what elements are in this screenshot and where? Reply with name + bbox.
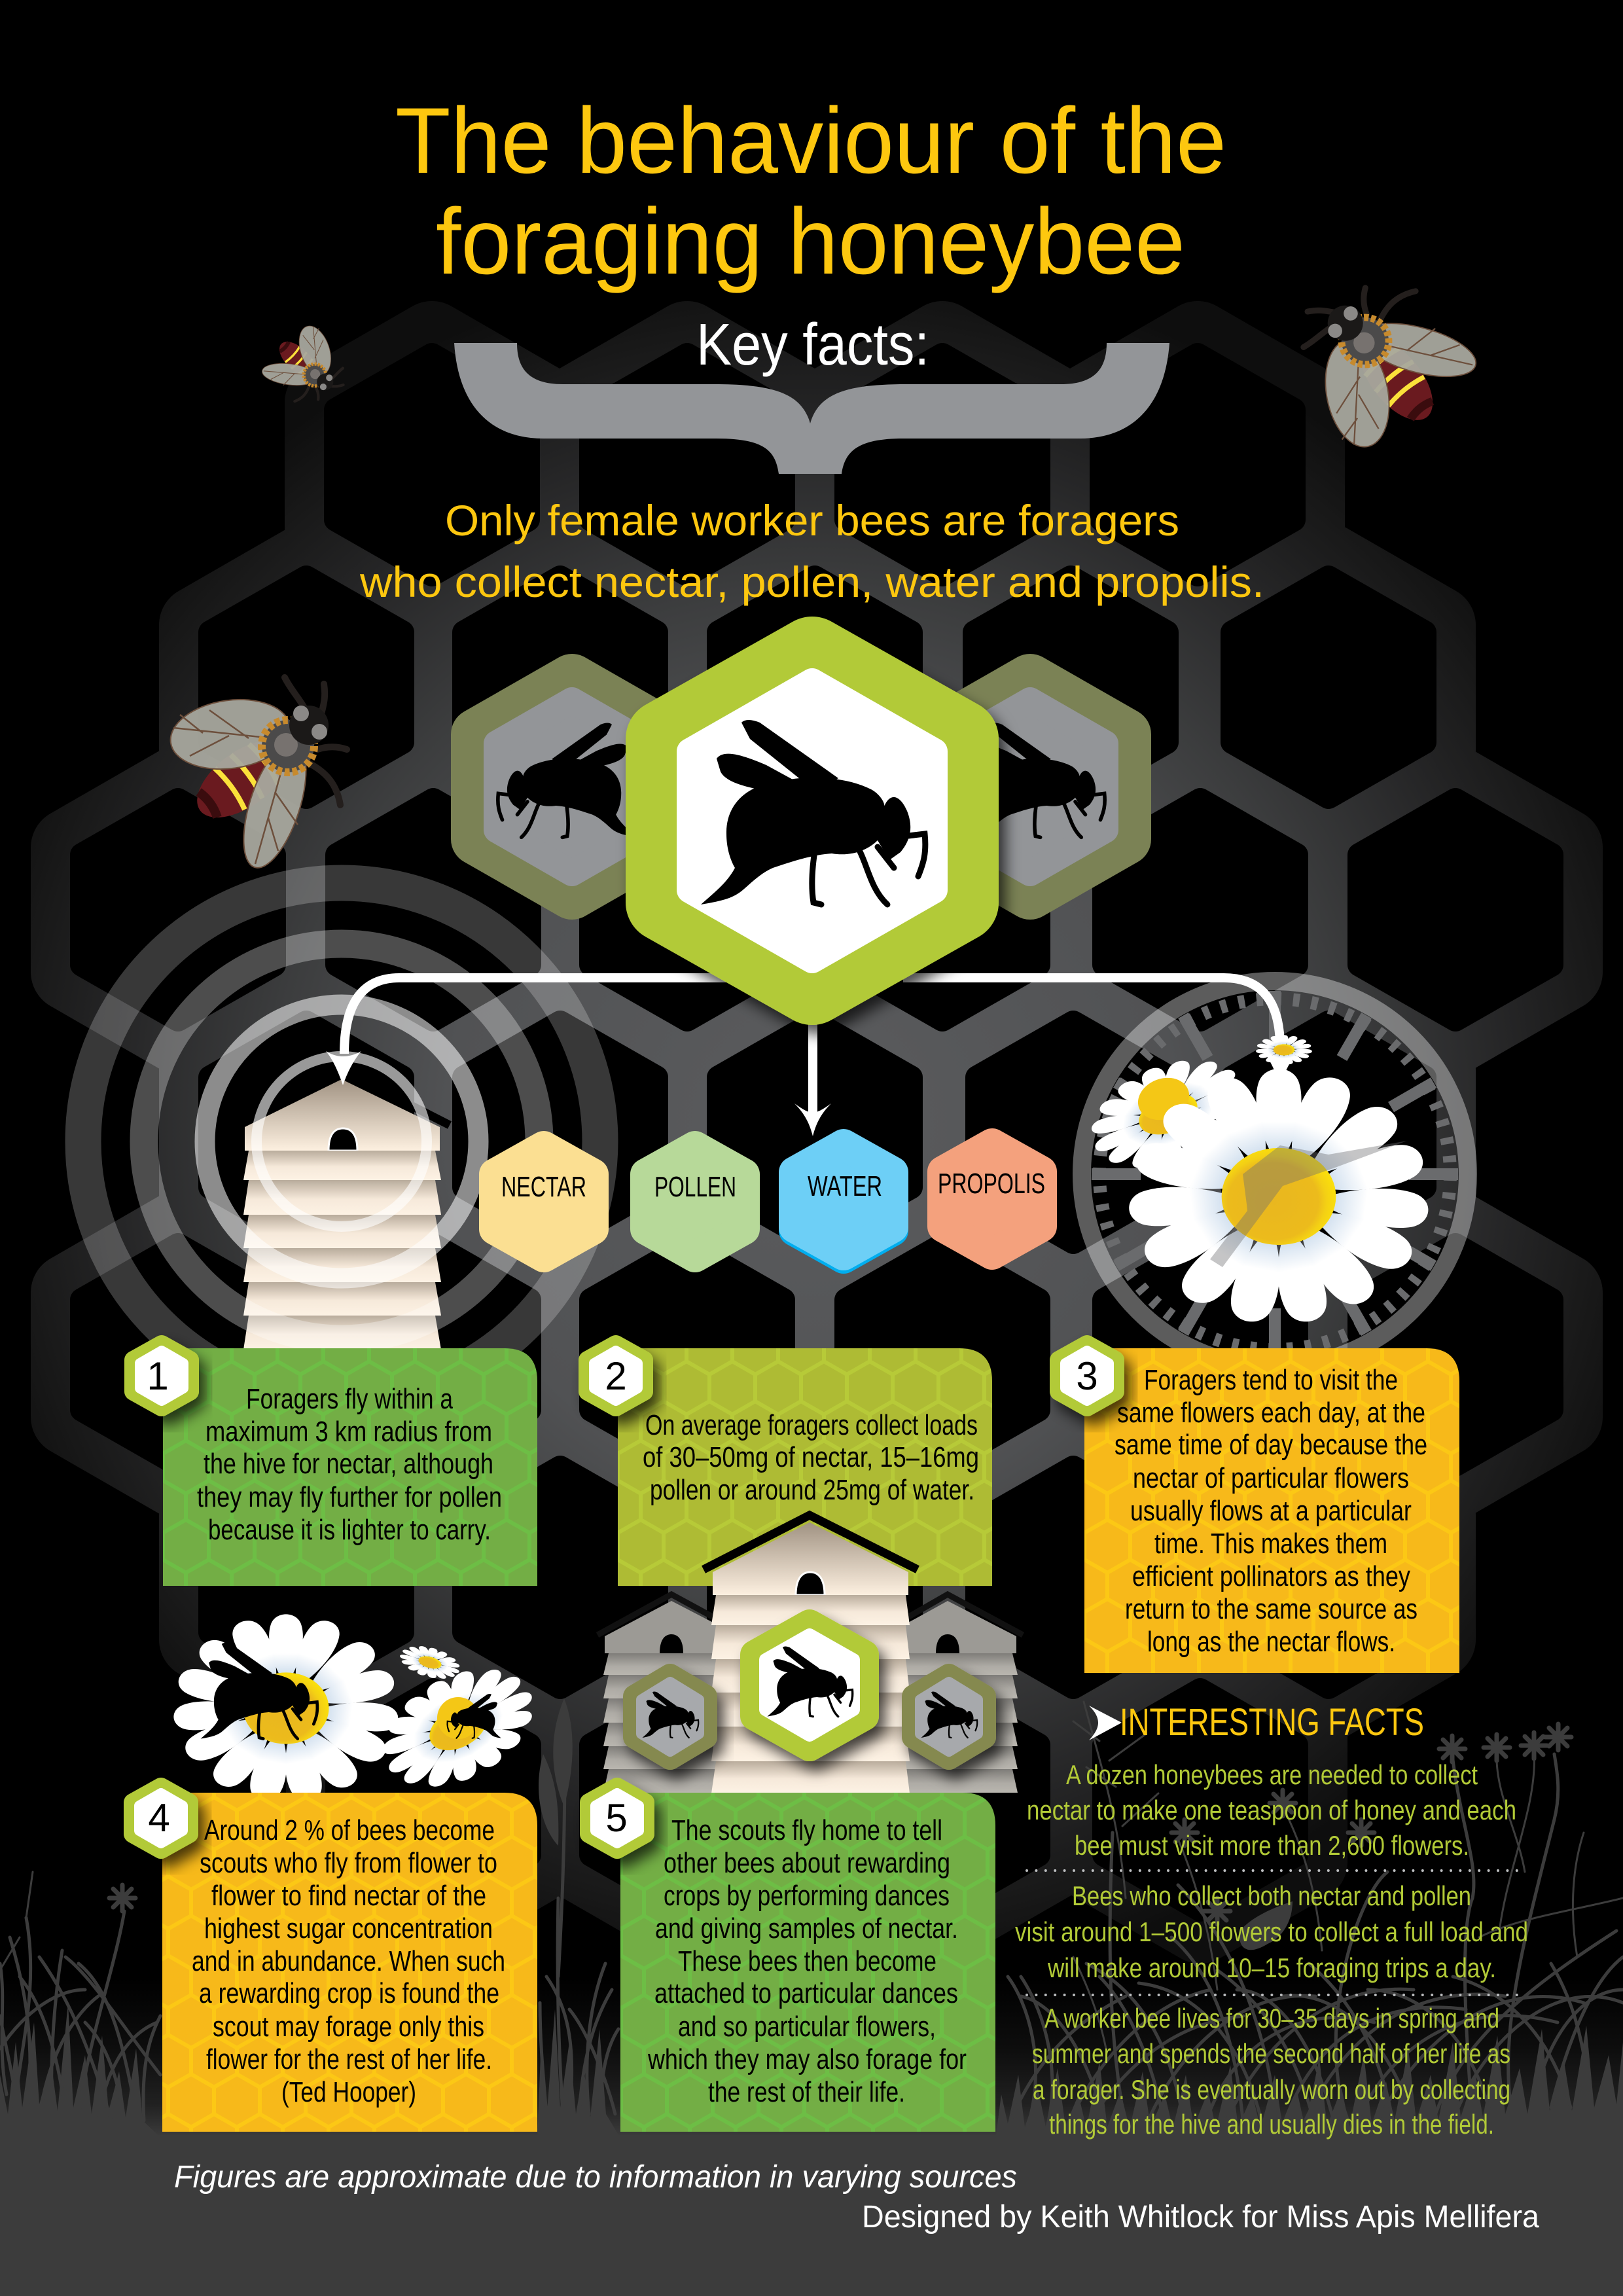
clock hands xyxy=(1210,1141,1407,1267)
interesting fact 1: A dozen honeybees are needed to collect xyxy=(1066,1759,1478,1790)
panel 1 text: the hive for nectar, although xyxy=(204,1448,493,1480)
clock xyxy=(1082,981,1468,1367)
panel 4 text: scout may forage only this xyxy=(213,2011,484,2043)
dotted divider xyxy=(1027,1994,1521,1996)
panel 5 text: which they may also forage for xyxy=(647,2043,967,2075)
panel 4 text: (Ted Hooper) xyxy=(281,2076,416,2108)
panel 3 text: return to the same source as xyxy=(1125,1593,1418,1625)
panel 5 text: and so particular flowers, xyxy=(678,2011,936,2043)
panel 5 text: These bees then become xyxy=(678,1945,936,1977)
daisy with bee: large xyxy=(172,1614,400,1803)
badge 2: 2 xyxy=(605,1354,627,1398)
panel 2 text: On average foragers collect loads xyxy=(645,1409,978,1441)
daisy with bee: small xyxy=(363,1645,554,1812)
panel 5 text xyxy=(647,1814,967,2108)
intro statement: Only female worker bees are foragers xyxy=(445,496,1179,545)
panel 3 text: long as the nectar flows. xyxy=(1147,1626,1395,1658)
badge 1: 1 xyxy=(147,1354,169,1398)
badge 3: 3 xyxy=(1076,1354,1098,1398)
hive badge: right bee xyxy=(914,1676,984,1758)
tag: water: WATER xyxy=(808,1170,882,1202)
side hives xyxy=(597,1594,1023,1793)
panel 2 text xyxy=(643,1409,979,1506)
interesting fact 2 xyxy=(1015,1880,1528,1983)
panel 4 text: a rewarding crop is found the xyxy=(199,1977,499,2009)
tag: propolis: PROPOLIS xyxy=(938,1168,1045,1200)
arrow: to hive xyxy=(326,978,726,1085)
credit: Designed by Keith Whitlock for Miss Apis Mellifera xyxy=(862,2200,1539,2234)
curly brace xyxy=(454,343,1169,474)
title: foraging honeybee xyxy=(436,190,1185,294)
interesting facts heading: INTERESTING FACTS xyxy=(1120,1701,1424,1744)
bee: left large xyxy=(166,677,347,875)
bee: top left small xyxy=(252,319,348,410)
hive top box xyxy=(245,1079,440,1151)
title xyxy=(395,89,1226,294)
left side hive xyxy=(597,1594,746,1793)
daisy on clock: second flower xyxy=(1075,1039,1262,1190)
interesting fact 2: will make around 10–15 foraging trips a day. xyxy=(1047,1952,1496,1983)
daisy on clock: main flower xyxy=(1127,1069,1431,1325)
panel 4 text: and in abundance. When such xyxy=(192,1945,505,1977)
panel 4 xyxy=(162,1793,537,2132)
panel 5 text: The scouts fly home to tell xyxy=(671,1814,942,1846)
side hexagon: right bee xyxy=(935,680,1125,893)
panel 3 text: usually flows at a particular xyxy=(1130,1495,1412,1527)
badge 4 xyxy=(133,1787,189,1850)
hive 1 xyxy=(236,1070,450,1350)
panel 4 text: highest sugar concentration xyxy=(204,1912,493,1945)
interesting fact 3: A worker bee lives for 30–35 days in spring and xyxy=(1044,2003,1499,2034)
honeycomb background grid xyxy=(31,301,1603,1964)
panel 5 xyxy=(620,1793,995,2132)
badge 5 xyxy=(589,1787,645,1850)
centre hive xyxy=(704,1515,918,1793)
interesting fact 3 xyxy=(1032,2003,1510,2140)
central bee hexagon xyxy=(665,656,959,986)
interesting fact 2: Bees who collect both nectar and pollen xyxy=(1072,1880,1471,1911)
radius rings around hive xyxy=(83,883,600,1400)
badge 3 xyxy=(1059,1344,1115,1407)
panel 5 text: the rest of their life. xyxy=(708,2076,905,2108)
panel 4 text: scouts who fly from flower to xyxy=(200,1847,497,1879)
interesting fact 2: visit around 1–500 flowers to collect a full load and xyxy=(1015,1916,1528,1947)
meadow grass silhouette and ground band xyxy=(0,1698,1623,2296)
tiny daisy on arrow xyxy=(1255,1035,1313,1065)
bee: top right xyxy=(1300,282,1487,454)
heading: key facts: Key facts: xyxy=(696,312,929,378)
panel 3 text xyxy=(1115,1364,1427,1658)
panel 4 text xyxy=(192,1814,505,2108)
arrow: to resources xyxy=(794,1021,831,1136)
panel 3 text: efficient pollinators as they xyxy=(1132,1560,1410,1592)
interesting fact 1: bee must visit more than 2,600 flowers. xyxy=(1075,1830,1469,1861)
white hexagon xyxy=(690,681,935,960)
tag: nectar xyxy=(495,1147,593,1257)
side hexagon: left bee xyxy=(477,680,667,893)
panel 1 text xyxy=(197,1383,502,1546)
hive layers xyxy=(243,1151,441,1350)
interesting fact 3: a forager. She is eventually worn out by collecting xyxy=(1033,2074,1510,2105)
title: The behaviour of the xyxy=(395,89,1226,193)
badge 1 xyxy=(134,1344,190,1407)
panel 2 text: pollen or around 25mg of water. xyxy=(650,1474,974,1506)
icon: arrowhead xyxy=(1089,1706,1122,1740)
panel 3 text: nectar of particular flowers xyxy=(1133,1462,1409,1494)
panel 4 text: flower for the rest of her life. xyxy=(206,2043,492,2075)
panel 5 text: and giving samples of nectar. xyxy=(655,1912,958,1945)
panel 1 xyxy=(163,1348,537,1586)
arrow: to flower xyxy=(903,978,1297,1085)
hive badge: centre bee xyxy=(755,1624,865,1747)
panel 1 text: they may fly further for pollen xyxy=(197,1481,502,1513)
panel 1 text: because it is lighter to carry. xyxy=(208,1514,491,1546)
interesting fact 3: things for the hive and usually dies in the field. xyxy=(1049,2109,1494,2140)
interesting fact 3: summer and spends the second half of her life as xyxy=(1032,2038,1510,2069)
dotted divider xyxy=(1027,1869,1521,1872)
panel 5 text: other bees about rewarding xyxy=(664,1847,950,1879)
panel 4 text: Around 2 % of bees become xyxy=(204,1814,495,1846)
badge 4: 4 xyxy=(148,1796,170,1840)
hive badge: left bee xyxy=(635,1676,705,1758)
icon: bee silhouette xyxy=(701,720,925,905)
panel 1 text: maximum 3 km radius from xyxy=(205,1416,492,1448)
footnote: Figures are approximate due to information in varying sources xyxy=(174,2160,1017,2195)
intro statement xyxy=(359,496,1264,606)
panel 3 xyxy=(1084,1348,1459,1673)
panel 2 text: of 30–50mg of nectar, 15–16mg xyxy=(643,1441,979,1473)
badge 5: 5 xyxy=(605,1796,628,1840)
panel 3 text: Foragers tend to visit the xyxy=(1144,1364,1398,1396)
intro statement: who collect nectar, pollen, water and propolis. xyxy=(359,558,1264,606)
panel 1 text: Foragers fly within a xyxy=(246,1383,453,1415)
panel 5 text: attached to particular dances xyxy=(654,1977,958,2009)
interesting fact 1 xyxy=(1027,1759,1516,1861)
right side hive xyxy=(877,1594,1023,1793)
tag: propolis xyxy=(938,1144,1045,1254)
tiny daisy xyxy=(396,1640,464,1685)
panel 4 text: flower to find nectar of the xyxy=(211,1880,486,1912)
interesting fact 1: nectar to make one teaspoon of honey and each xyxy=(1027,1795,1516,1825)
panel 5 text: crops by performing dances xyxy=(664,1880,950,1912)
panel 2 xyxy=(618,1348,992,1586)
tag: pollen: POLLEN xyxy=(654,1171,736,1203)
tag: nectar: NECTAR xyxy=(501,1171,586,1203)
hive roof xyxy=(236,1070,450,1125)
badge 2 xyxy=(588,1344,644,1407)
panel 3 text: same flowers each day, at the xyxy=(1117,1397,1425,1429)
tag: pollen xyxy=(646,1147,744,1257)
hive entrance xyxy=(329,1128,357,1151)
panel 3 text: same time of day because the xyxy=(1115,1429,1427,1461)
tag: water xyxy=(794,1145,893,1258)
panel 3 text: time. This makes them xyxy=(1154,1528,1387,1560)
